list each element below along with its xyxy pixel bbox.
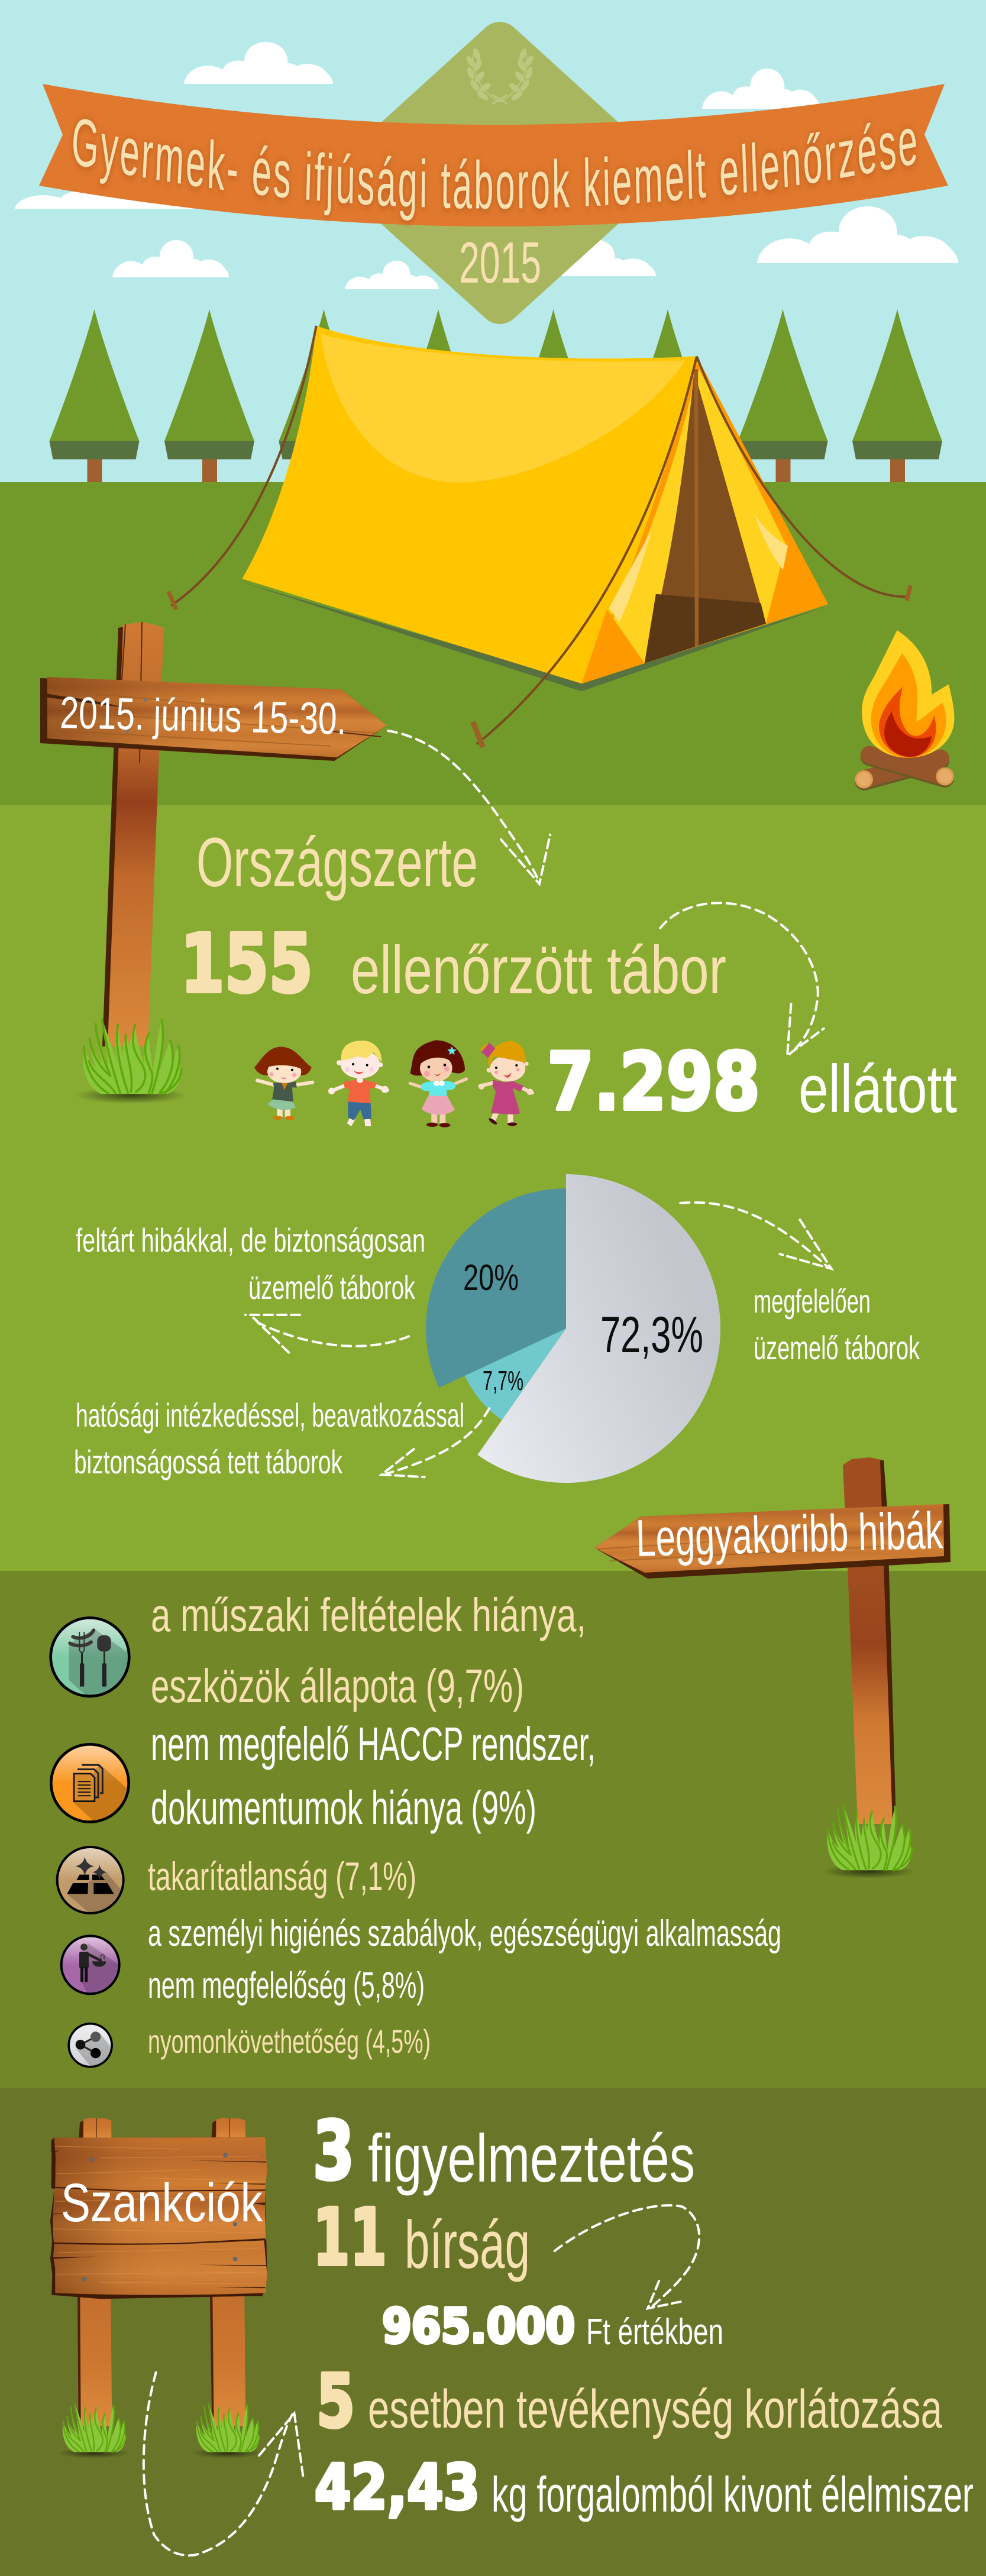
clouds — [15, 42, 958, 289]
icon: campfire — [855, 630, 954, 789]
stat: people served — [547, 1036, 957, 1128]
tent ropes and stakes — [169, 326, 910, 747]
panel: most common faults — [0, 1571, 986, 2088]
fault text: eszközök állapota (9,7%) — [151, 1660, 524, 1712]
grass tufts — [58, 2404, 129, 2458]
fault item 4 — [60, 1913, 781, 2006]
icon: grill tools — [49, 1616, 131, 1699]
dashed arrow to Országszerte — [388, 731, 550, 884]
post — [843, 1457, 896, 1824]
signpost: most common faults — [594, 1457, 951, 1879]
pie legend labels: hatósági intézkedéssel, beavatkozással — [76, 1396, 464, 1434]
stat: camps checked — [180, 918, 726, 1011]
child 3 — [410, 1040, 466, 1127]
stat: people served: 7.298 — [547, 1036, 760, 1128]
child 1 — [254, 1047, 312, 1120]
fault text: a műszaki feltételek hiánya, — [151, 1589, 586, 1641]
fault text — [148, 1913, 781, 2006]
fault text — [151, 1589, 586, 1712]
sanction: fine amount — [382, 2299, 723, 2354]
icon: share / traceability — [67, 2023, 114, 2069]
sanction: fines — [313, 2192, 530, 2283]
child 4 — [479, 1041, 533, 1126]
board — [594, 1504, 951, 1579]
dashed arrows of pie chart — [245, 1203, 831, 1477]
pie legend labels — [74, 1221, 920, 1480]
dashed arrow to fine amount — [555, 2205, 699, 2308]
pie legend labels: üzemelő táborok — [248, 1269, 416, 1306]
sanction: food withdrawn — [315, 2451, 974, 2523]
background: meadow — [0, 482, 986, 805]
fault text — [151, 1718, 596, 1834]
post — [102, 622, 164, 1046]
trees — [50, 309, 942, 482]
grass tuft — [821, 1806, 916, 1879]
icon: laurel wreath — [465, 47, 535, 104]
grass tuft — [76, 1019, 186, 1104]
banner ribbon — [39, 84, 948, 226]
background: sky — [0, 0, 986, 482]
pie labels — [463, 1258, 703, 1396]
fault text: nyomonkövethetőség (4,5%) — [148, 2023, 431, 2060]
fault text: nem megfelelő HACCP rendszer, — [151, 1718, 596, 1770]
icon: hand washing — [60, 1935, 122, 1997]
dashed arrow to ellátott — [660, 903, 824, 1055]
pie legend labels: biztonságossá tett táborok — [74, 1443, 343, 1480]
board — [40, 678, 387, 761]
pie legend labels: feltárt hibákkal, de biztonságosan — [76, 1221, 425, 1259]
date label: 2015. június 15-30. — [60, 688, 347, 744]
pie chart — [426, 1174, 720, 1483]
panel: national statistics — [0, 805, 986, 1571]
title: Gyermek- és ifjúsági táborok kiemelt ellenőrzése — [72, 117, 917, 226]
sanction: restrictions: 5 — [316, 2359, 355, 2444]
fault text: nem megfelelőség (5,8%) — [148, 1965, 425, 2006]
icon: clean floor — [56, 1846, 126, 1917]
posts — [77, 2118, 245, 2426]
diamond badge — [356, 43, 644, 303]
fault item 1 — [49, 1589, 586, 1712]
pie labels: 20% — [463, 1258, 519, 1298]
board planks — [50, 2137, 267, 2299]
signpost: date — [40, 622, 387, 1104]
signboard: sanctions — [50, 2118, 267, 2458]
sanction: warnings: figyelmeztetés — [368, 2121, 695, 2196]
icon: documents — [50, 1743, 130, 1825]
fault item 3 — [56, 1846, 416, 1917]
sanction: warnings — [313, 2105, 695, 2198]
sanction: fine amount: 965.000 — [382, 2299, 575, 2354]
year: 2015 — [459, 230, 541, 295]
sanction: fines: 11 — [313, 2192, 387, 2283]
sanction: food withdrawn: 42,43 — [315, 2451, 480, 2523]
sanction: warnings: 3 — [313, 2105, 354, 2198]
sanction: fines: bírság — [405, 2208, 530, 2283]
illustration: tent — [169, 326, 910, 747]
pie legend labels: megfelelően — [754, 1282, 871, 1320]
stat: camps checked: 155 — [180, 918, 313, 1011]
board label: Szankciók — [61, 2173, 263, 2233]
pie labels: 72,3% — [600, 1307, 703, 1363]
illustration: children — [254, 1040, 533, 1127]
fault item 2 — [50, 1718, 596, 1834]
pie labels: 7,7% — [483, 1365, 523, 1396]
sanction: restrictions — [316, 2359, 943, 2444]
dashed arrow to restrictions — [144, 2373, 303, 2555]
fault item 5 — [67, 2023, 431, 2069]
sanction: fine amount: Ft értékben — [586, 2312, 723, 2353]
panel: sanctions — [0, 2088, 986, 2576]
stat: camps checked: ellenőrzött tábor — [351, 933, 726, 1008]
fault text: dokumentumok hiánya (9%) — [151, 1781, 536, 1834]
heading: nationwide: Országszerte — [196, 824, 478, 902]
child 2 — [328, 1041, 389, 1126]
fault text: takarítatlanság (7,1%) — [148, 1854, 416, 1899]
